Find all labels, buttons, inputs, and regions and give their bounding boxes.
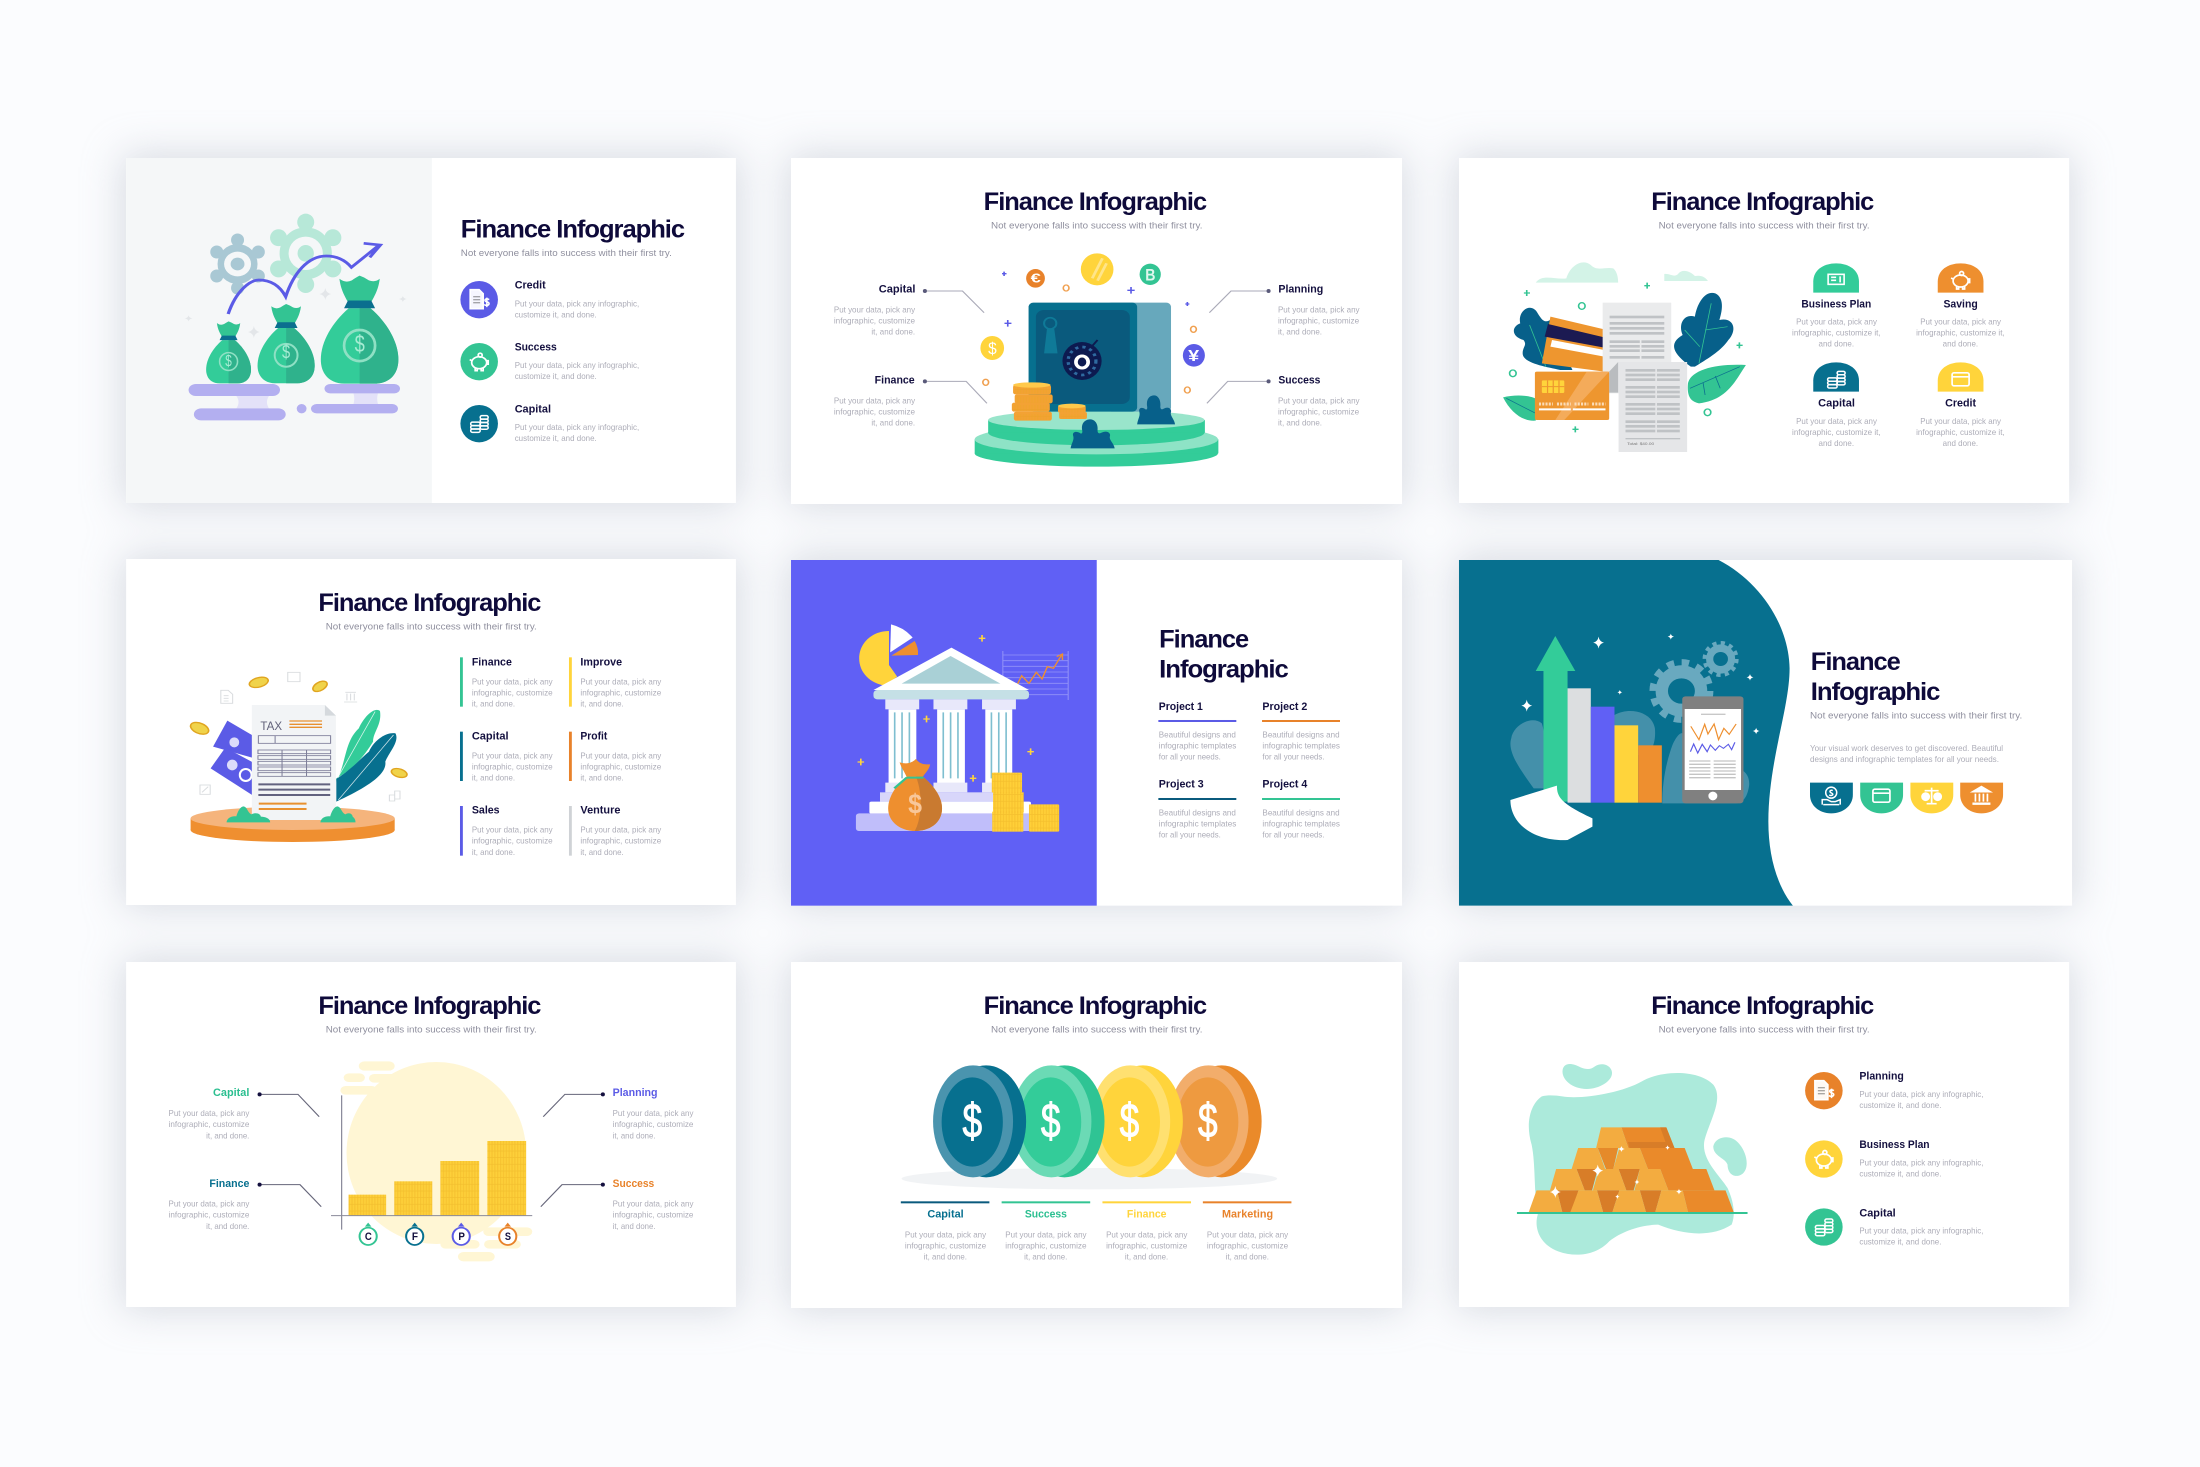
- illustration: bank building with money bag: $: [908, 789, 922, 820]
- item: success: Success: [1025, 1208, 1067, 1220]
- item: project 4: infographic templates: [1262, 819, 1340, 828]
- item: profit: Profit: [580, 730, 607, 742]
- callout: capital: it, and done.: [871, 327, 915, 336]
- chart: coin stacks: S: [505, 1230, 511, 1243]
- item: project 3: for all your needs.: [1159, 831, 1221, 839]
- item: business plan: infographic, customize it,: [1792, 329, 1881, 337]
- item: business plan: and done.: [1819, 340, 1854, 348]
- callout: finance: it, and done.: [871, 418, 915, 427]
- item: capital: Put your data, pick any: [1796, 417, 1877, 426]
- item: capital: infographic, customize it,: [1792, 428, 1881, 437]
- item: profit: [569, 730, 662, 782]
- item: project 4: [1262, 778, 1340, 839]
- item: improve: Improve: [580, 655, 622, 668]
- item: finance: Put your data, pick any: [1106, 1230, 1188, 1239]
- item: capital: Put your data, pick any infographic,: [515, 423, 639, 432]
- illustration: safe on podium: ¥: [1188, 347, 1199, 365]
- item: project 1: infographic templates: [1159, 742, 1237, 750]
- item: sales: infographic, customize: [472, 837, 553, 845]
- item: finance: [1102, 1201, 1191, 1261]
- item: venture: Venture: [580, 804, 621, 816]
- callout: capital: infographic, customize: [169, 1120, 249, 1129]
- illustration: money bags with gears: [185, 214, 407, 420]
- item: profit: it, and done.: [580, 774, 624, 782]
- subtitle: Not everyone falls into success with their first try.: [991, 1026, 1202, 1035]
- item: venture: Put your data, pick any: [580, 826, 662, 834]
- callout: success: infographic, customize: [613, 1211, 693, 1219]
- subtitle: Not everyone falls into success with their first try.: [991, 222, 1202, 231]
- item: project 4: Beautiful designs and: [1262, 808, 1340, 817]
- item: success: customize it, and done.: [515, 372, 597, 381]
- callout: success: it, and done.: [1278, 418, 1322, 427]
- body text: Your visual work deserves to get discovered. Beautiful: [1810, 744, 2003, 753]
- title: Finance Infographic: [1651, 188, 1874, 215]
- item: success: Success: [515, 341, 557, 353]
- illustration: credit cards, receipts, leaves: Total: $40.00: [1627, 441, 1655, 446]
- item: improve: infographic, customize: [580, 688, 661, 697]
- title: Finance: [1811, 648, 1901, 675]
- title: [1811, 648, 1940, 705]
- item: finance: Finance: [1127, 1208, 1167, 1220]
- callout: planning: [1209, 283, 1360, 336]
- callout: finance: Finance: [209, 1177, 250, 1190]
- illustration: row of coins: $: [1198, 1094, 1218, 1148]
- callout: finance: it, and done.: [206, 1222, 249, 1231]
- item: success: [1002, 1201, 1090, 1261]
- body text: designs and infographic templates for all your needs.: [1810, 755, 1999, 764]
- item: capital: [460, 730, 553, 782]
- item: project 4: for all your needs.: [1262, 831, 1324, 839]
- chart: coin stacks: [331, 1061, 532, 1261]
- callout: finance: Finance: [875, 374, 915, 386]
- item: capital: infographic, customize: [905, 1241, 986, 1250]
- illustration: gold bar pyramid: [1517, 1064, 1748, 1255]
- item: finance: infographic, customize: [472, 688, 553, 697]
- item: saving: Saving: [1943, 297, 1978, 310]
- item: credit: infographic, customize it,: [1916, 428, 2005, 437]
- panel 3: cards and receipts: [1459, 158, 2069, 503]
- item: capital: Capital: [1859, 1206, 1896, 1219]
- subtitle: Not everyone falls into success with their first try.: [326, 1025, 537, 1035]
- illustration: row of coins: $: [962, 1094, 982, 1148]
- callout: capital: Capital: [879, 283, 916, 295]
- item: credit: customize it, and done.: [515, 310, 597, 319]
- item: capital: Capital: [472, 730, 509, 742]
- item: marketing: Put your data, pick any: [1207, 1230, 1289, 1239]
- title: Finance Infographic: [461, 215, 685, 243]
- callout: capital: infographic, customize: [834, 316, 915, 325]
- item: success: [460, 341, 639, 381]
- item: success: Put your data, pick any: [1005, 1230, 1087, 1239]
- title: Finance Infographic: [318, 992, 541, 1019]
- illustration: safe on podium: $: [988, 339, 997, 358]
- item: capital: Put your data, pick any infographic,: [1859, 1227, 1983, 1235]
- chart: coin stacks: P: [458, 1230, 465, 1243]
- callout: planning: infographic, customize: [613, 1120, 693, 1129]
- item: capital: [1792, 362, 1881, 448]
- callout: planning: infographic, customize: [1278, 316, 1359, 325]
- illustration: tax form on platform: TAX: [260, 719, 282, 733]
- callout: finance: infographic, customize: [834, 407, 915, 416]
- callout: finance: [834, 374, 987, 427]
- item: sales: Sales: [472, 804, 500, 816]
- item: business plan: Put your data, pick any: [1796, 318, 1877, 326]
- panel 7: coin stacks chart: [126, 962, 736, 1307]
- callout: capital: Capital: [213, 1086, 249, 1099]
- subtitle: Not everyone falls into success with their first try.: [1659, 1025, 1870, 1035]
- item: planning: Put your data, pick any infographic,: [1859, 1090, 1983, 1099]
- callout: planning: Planning: [1278, 283, 1323, 295]
- title: Infographic: [1159, 655, 1288, 683]
- item: project 2: Beautiful designs and: [1262, 731, 1340, 739]
- illustration: bank building with money bag: [856, 624, 1068, 832]
- callout: capital: Put your data, pick any: [169, 1109, 250, 1118]
- item: capital: infographic, customize: [472, 762, 553, 771]
- item: sales: it, and done.: [472, 848, 515, 857]
- item: planning: [1805, 1070, 1983, 1110]
- illustration: safe on podium: B: [1145, 265, 1156, 284]
- subtitle: Not everyone falls into success with their first try.: [461, 249, 672, 259]
- callout: planning: Planning: [613, 1086, 658, 1099]
- item: credit: and done.: [1943, 439, 1978, 448]
- item: business plan: Put your data, pick any infographic,: [1859, 1158, 1983, 1167]
- callout: success: [541, 1177, 694, 1231]
- callout: success: Put your data, pick any: [613, 1200, 694, 1208]
- callout: planning: Put your data, pick any: [613, 1109, 694, 1118]
- item: success: infographic, customize: [1005, 1241, 1087, 1250]
- item: capital: Capital: [927, 1208, 964, 1220]
- item: saving: Put your data, pick any: [1920, 318, 2001, 326]
- title: Finance: [1159, 625, 1249, 653]
- item: planning: customize it, and done.: [1859, 1101, 1941, 1110]
- callout: planning: [543, 1086, 694, 1140]
- item: business plan: [1805, 1138, 1983, 1178]
- illustration: safe on podium: €: [1031, 271, 1041, 285]
- item: capital: [901, 1201, 989, 1261]
- item: project 3: infographic templates: [1159, 819, 1237, 828]
- item: project 2: [1262, 700, 1340, 761]
- item: capital: Capital: [1818, 396, 1855, 409]
- item: saving: and done.: [1943, 340, 1978, 348]
- item: improve: Put your data, pick any: [580, 677, 662, 686]
- illustration: tax form on platform: [188, 672, 409, 842]
- title: Finance Infographic: [318, 589, 541, 616]
- panel 6: growth chart: [1459, 560, 2072, 906]
- page backdrop shadows: [122, 154, 2076, 1311]
- item: business plan: Business Plan: [1801, 297, 1871, 310]
- item: improve: it, and done.: [580, 700, 624, 708]
- item: project 3: Project 3: [1159, 778, 1204, 790]
- item: finance: it, and done.: [472, 700, 515, 708]
- item: credit: Credit: [1945, 396, 1976, 409]
- callout: finance: infographic, customize: [169, 1211, 249, 1219]
- item: project 2: for all your needs.: [1262, 753, 1324, 761]
- chart: coin stacks: C: [365, 1230, 372, 1243]
- illustration: money bags with gears: $: [282, 341, 290, 363]
- item: credit: [460, 279, 639, 319]
- callout: capital: it, and done.: [206, 1131, 249, 1140]
- illustration: bar chart with arrow and phone: [1510, 634, 1760, 840]
- item: project 3: [1158, 778, 1237, 839]
- item: sales: Put your data, pick any: [472, 826, 553, 834]
- callout: success: Success: [1278, 374, 1321, 386]
- item: project 1: Beautiful designs and: [1159, 731, 1236, 739]
- item: capital: it, and done.: [472, 774, 515, 782]
- callout: success: Success: [613, 1177, 655, 1190]
- item: planning: Planning: [1859, 1070, 1904, 1082]
- callout: capital: Put your data, pick any: [834, 305, 916, 314]
- title: Finance Infographic: [1651, 992, 1874, 1019]
- item: venture: [569, 804, 662, 857]
- item: marketing: Marketing: [1222, 1208, 1273, 1220]
- title: Finance Infographic: [984, 992, 1207, 1019]
- item: success: Put your data, pick any infographic,: [515, 361, 639, 370]
- item: project 4: Project 4: [1262, 778, 1308, 790]
- illustration: row of coins: $: [1120, 1094, 1139, 1148]
- item: project 1: Project 1: [1159, 700, 1203, 713]
- item: credit: [1916, 362, 2005, 448]
- item: venture: infographic, customize: [580, 837, 661, 845]
- item: saving: [1916, 263, 2005, 348]
- callout: finance: Put your data, pick any: [169, 1200, 250, 1208]
- item: marketing: [1203, 1201, 1291, 1261]
- subtitle: Not everyone falls into success with their first try.: [326, 622, 537, 632]
- item: capital: customize it, and done.: [1859, 1238, 1941, 1246]
- illustration: money bags with gears: $: [355, 331, 365, 357]
- item: capital: Put your data, pick any: [472, 751, 553, 760]
- illustration: row of coins: $: [1041, 1094, 1060, 1148]
- item: credit: Credit: [515, 279, 546, 291]
- panel 5: bank: [791, 560, 1402, 906]
- item: finance: Finance: [472, 655, 512, 668]
- item: finance: it, and done.: [1125, 1253, 1168, 1261]
- subtitle: Not everyone falls into success with their first try.: [1659, 221, 1870, 231]
- callout: planning: it, and done.: [1278, 327, 1322, 336]
- callout: success: infographic, customize: [1278, 407, 1359, 416]
- item: saving: infographic, customize it,: [1916, 329, 2005, 337]
- callout: capital: [169, 1086, 319, 1140]
- item: project 3: Beautiful designs and: [1159, 808, 1236, 817]
- panel 9: gold bars: [1459, 962, 2069, 1307]
- illustration: credit cards, receipts, leaves: [1503, 262, 1746, 452]
- item: marketing: infographic, customize: [1207, 1241, 1288, 1250]
- callout: planning: it, and done.: [613, 1131, 656, 1140]
- callout: success: it, and done.: [613, 1222, 656, 1231]
- item: capital: and done.: [1819, 439, 1854, 448]
- item: project 2: Project 2: [1262, 700, 1308, 713]
- item: project 1: for all your needs.: [1159, 753, 1221, 761]
- illustration: row of coins: [902, 1065, 1277, 1189]
- chart: coin stacks: F: [412, 1230, 418, 1243]
- title: Infographic: [1811, 678, 1940, 705]
- icon badges: [1810, 783, 2003, 813]
- panel 4: tax document: [126, 559, 736, 905]
- item: credit: Put your data, pick any: [1920, 417, 2001, 426]
- callout: capital: [834, 283, 984, 336]
- item: business plan: [1792, 263, 1881, 348]
- item: capital: Capital: [515, 403, 551, 415]
- callout: success: Put your data, pick any: [1278, 396, 1360, 405]
- illustration: safe on podium: [975, 253, 1218, 467]
- title: Finance Infographic: [984, 188, 1207, 215]
- item: business plan: customize it, and done.: [1859, 1169, 1941, 1178]
- item: finance: infographic, customize: [1106, 1241, 1187, 1250]
- item: capital: [460, 403, 639, 443]
- item: success: it, and done.: [1024, 1253, 1067, 1261]
- item: credit: Put your data, pick any infographic,: [515, 299, 639, 308]
- body text: [1810, 744, 2003, 764]
- panel 2: safe: [791, 158, 1402, 504]
- subtitle: Not everyone falls into success with their first try.: [1810, 711, 2022, 721]
- item: capital: Put your data, pick any: [905, 1230, 987, 1239]
- panel 8: four coins: [791, 962, 1402, 1308]
- item: improve: [569, 655, 662, 708]
- item: business plan: Business Plan: [1859, 1138, 1930, 1151]
- callout: planning: Put your data, pick any: [1278, 305, 1360, 314]
- item: sales: [460, 804, 553, 857]
- item: profit: infographic, customize: [580, 762, 661, 771]
- item: finance: Put your data, pick any: [472, 677, 553, 686]
- item: finance: [460, 655, 553, 708]
- title: [1159, 625, 1288, 683]
- item: capital: it, and done.: [924, 1253, 967, 1261]
- callout: finance: Put your data, pick any: [834, 396, 916, 405]
- item: marketing: it, and done.: [1226, 1253, 1269, 1261]
- item: project 2: infographic templates: [1262, 742, 1340, 750]
- item: capital: [1805, 1206, 1983, 1246]
- item: project 1: [1158, 700, 1237, 761]
- illustration: money bags with gears: $: [225, 352, 232, 370]
- item: capital: customize it, and done.: [515, 434, 597, 443]
- item: venture: it, and done.: [580, 848, 624, 857]
- callout: success: [1207, 374, 1360, 427]
- panel 1: money bags: [126, 158, 736, 503]
- item: profit: Put your data, pick any: [580, 751, 662, 760]
- callout: finance: [169, 1177, 321, 1231]
